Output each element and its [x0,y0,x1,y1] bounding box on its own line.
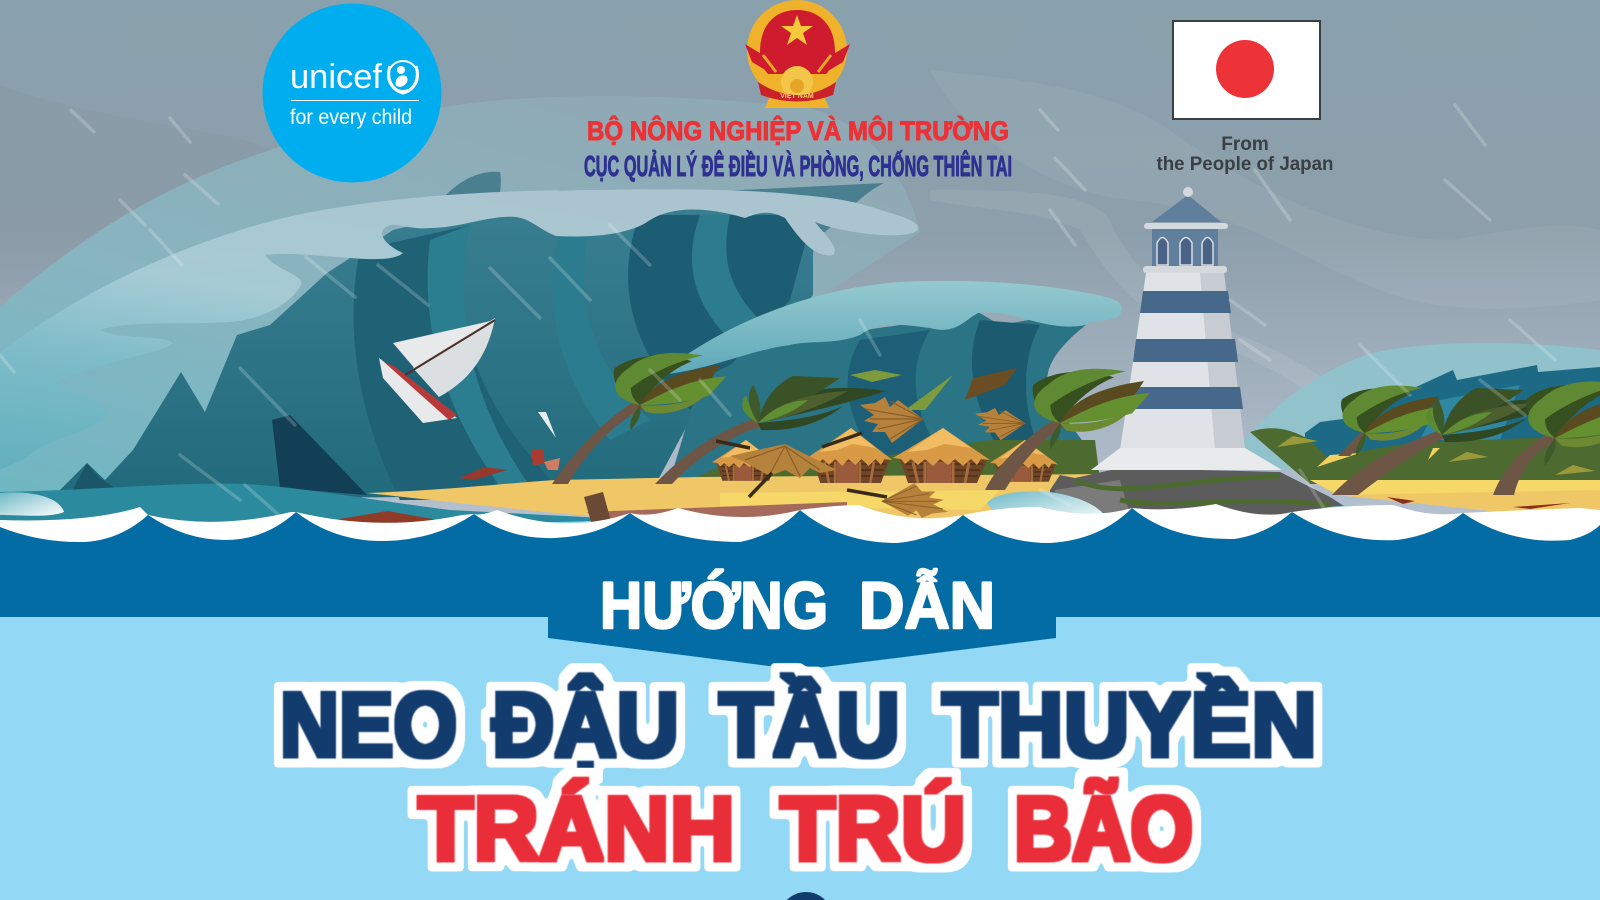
flying thatch and leaves [850,368,1025,518]
palm A right [1338,386,1444,456]
tower [1120,273,1245,450]
small foam waves [0,491,1545,525]
palm 2 [655,376,886,484]
main title line 1 [280,674,1317,776]
storm clouds [0,70,1600,420]
dark circle at bottom edge [787,892,825,900]
main title line 2: BÃO [1014,779,1193,880]
palms [552,353,1600,495]
ground behind huts [690,440,1100,480]
light blue lower background [0,617,1600,900]
foam lip [0,189,918,470]
third wave [1240,343,1600,470]
unicef logo: for every child [290,106,412,129]
Japan credit text: the People of Japan [1156,154,1334,175]
palm 3 in front of lighthouse [985,369,1150,490]
icon: Japan flag [1173,21,1320,119]
lighthouse [1050,187,1361,522]
foreground water [0,484,640,535]
wooden boat and dock [339,492,847,530]
main title line 1: NEO [280,675,457,776]
big breaking wave [0,96,920,520]
ministry name heading: BỘ NÔNG NGHIỆP VÀ MÔI TRƯỜNG [587,115,1009,146]
lantern room [1152,229,1218,266]
department name heading: CỤC QUẢN LÝ ĐÊ ĐIỀU VÀ PHÒNG, CHỐNG THIÊN TAI [584,149,1012,183]
palm C right [1493,382,1600,495]
icon: Vietnam national emblem [745,0,850,108]
dark blue sea band with banner [0,508,1600,670]
wave fins behind the lip [444,172,884,232]
beach sand [367,474,1110,522]
palm 1 [552,353,726,484]
Japan credit text [1156,134,1334,175]
rock [1050,468,1361,522]
icon: Vietnam national emblem: VIỆT NAM [780,91,814,100]
palm B right [1332,388,1570,495]
right green hill [1250,428,1600,484]
huts [712,428,1058,483]
main title line 2: TRÚ [780,779,966,880]
wave stripes [70,215,813,500]
banner heading: HƯỚNG [600,568,828,642]
white wave crest [0,504,1600,560]
sailboat [379,318,495,423]
unicef logo [262,4,442,182]
rain streaks [0,105,1555,525]
roof [1152,195,1221,222]
banner heading [600,568,995,642]
main title line 1: ĐẬU [492,674,679,776]
unicef logo: unicef [290,58,383,96]
right beach sand [1310,480,1600,517]
Japan credit text: From [1221,134,1269,155]
banner heading: DẪN [859,568,995,642]
second wave [660,281,1122,480]
main title line 1: THUYỀN [942,674,1317,776]
icon: unicef emblem [388,61,418,93]
main title line 1: TẦU [719,674,900,776]
main title line 2 [418,779,1193,880]
main title line 2: TRÁNH [418,779,735,880]
collapsed roof and broken poles [716,433,887,497]
stormy sky background [0,0,1600,520]
wave body [50,190,820,500]
debris [459,412,560,480]
